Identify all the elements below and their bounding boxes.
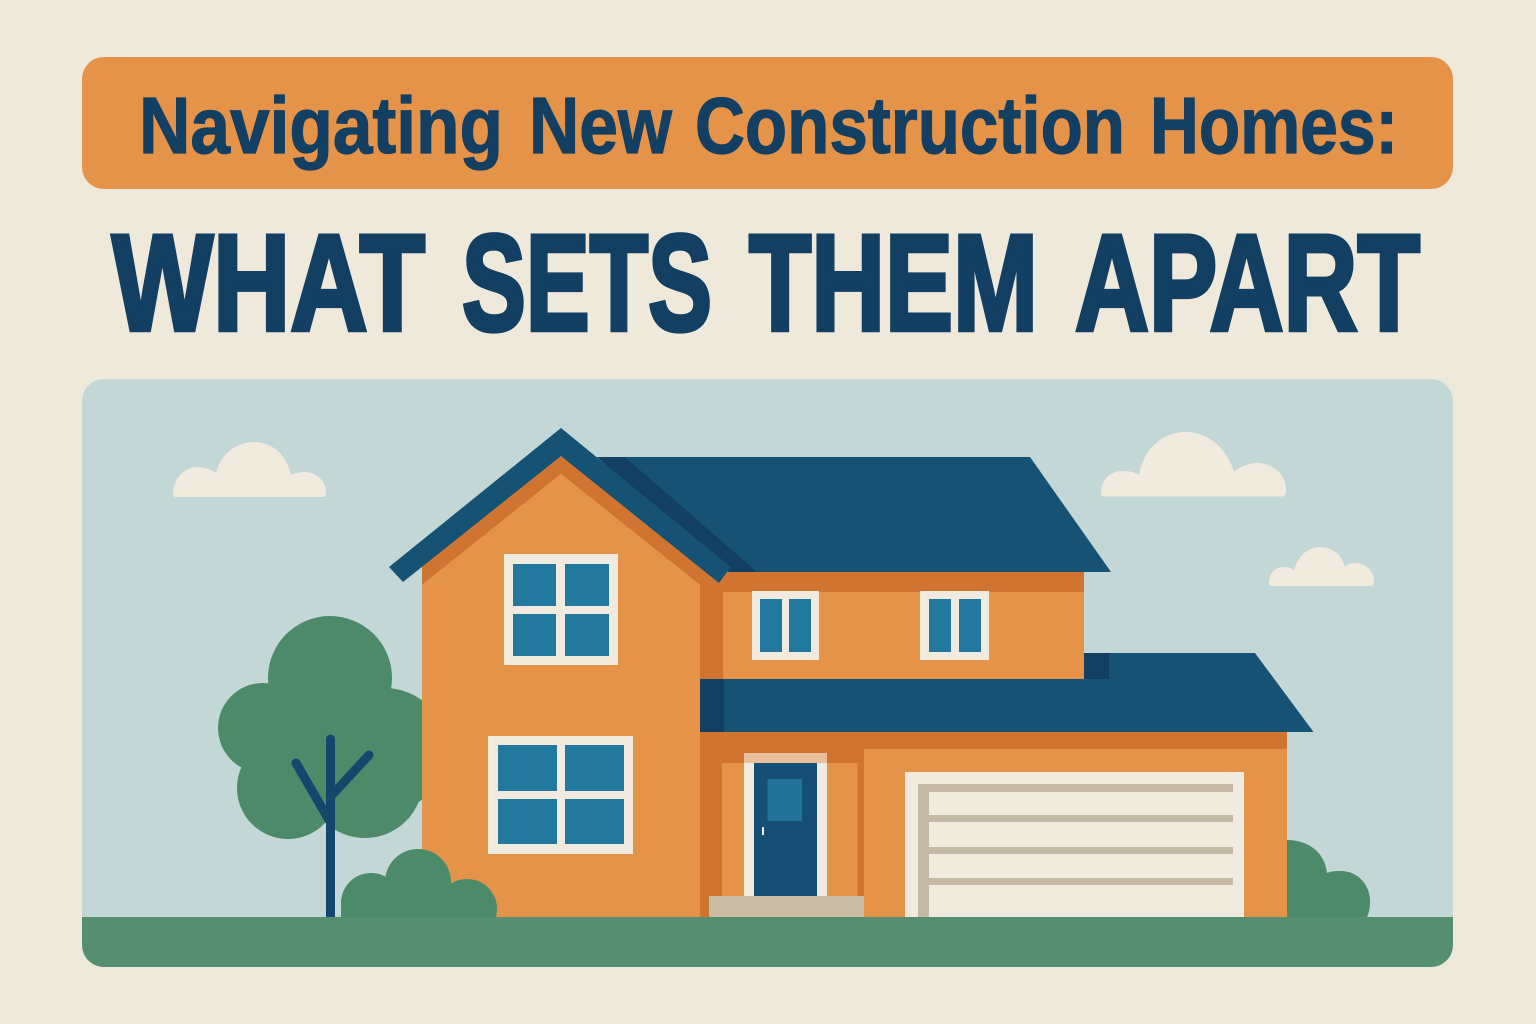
gable wall: [422, 474, 700, 917]
garage roof shadows: [700, 653, 1109, 732]
garage wall: [864, 749, 1287, 917]
tree trunk and branches: [296, 739, 369, 917]
main roof shadow stripe: [597, 457, 757, 572]
main heading: SETS: [462, 207, 712, 360]
left bush: [341, 849, 497, 917]
header banner: [82, 57, 1453, 189]
garage roof: [700, 653, 1314, 732]
title line one: [139, 81, 1398, 170]
gable wall fascia: [422, 456, 706, 585]
right bush: [1287, 840, 1370, 917]
lower storey dark band: [700, 732, 1287, 917]
door handle: [762, 827, 764, 835]
main heading: WHAT: [112, 207, 425, 360]
gable roof: [389, 428, 731, 583]
main heading: APART: [1075, 207, 1420, 360]
cloud left: [173, 442, 326, 497]
front door frame: [744, 753, 827, 896]
sky: [82, 379, 1453, 967]
upper floor window two: [920, 591, 989, 660]
main heading: THEM: [749, 207, 1038, 360]
main roof: [597, 457, 1111, 572]
upper floor wall: [723, 592, 1084, 680]
title line one: Homes:: [1150, 81, 1398, 170]
title line one: New: [529, 81, 673, 170]
illustration panel: house scene: [82, 379, 1453, 967]
main heading: [112, 207, 1420, 360]
cloud right: [1101, 432, 1286, 496]
house: [389, 428, 1314, 917]
porch step: [709, 896, 864, 917]
front door: [754, 763, 817, 896]
side column: [700, 592, 723, 679]
tree canopy: [218, 616, 422, 839]
garage door: [905, 772, 1244, 917]
upper gable window: [504, 554, 618, 665]
porch wall: [722, 763, 858, 896]
lower gable window: [488, 736, 633, 854]
title line one: Navigating: [139, 81, 503, 170]
door window: [768, 779, 802, 821]
cloud small: [1269, 547, 1374, 586]
grass ground: [82, 917, 1453, 967]
title line one: Construction: [695, 81, 1125, 170]
upper floor fascia band: [700, 572, 1084, 592]
upper floor window one: [752, 591, 819, 660]
